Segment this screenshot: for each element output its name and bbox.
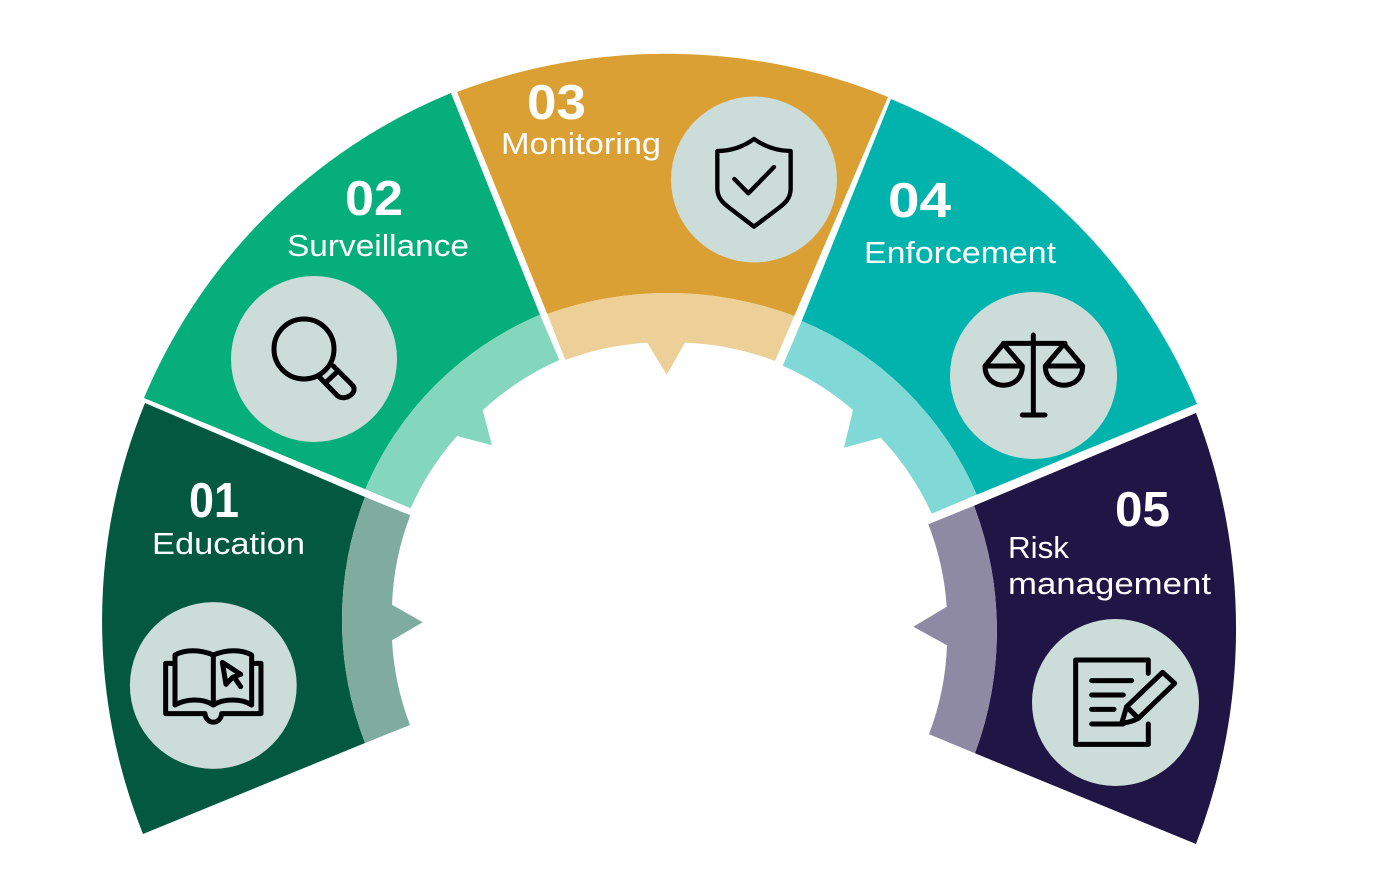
panel: 03 Monitoring <box>457 54 888 375</box>
segment: surveillance outer band <box>144 93 540 489</box>
label: Risk management: management <box>1008 566 1211 601</box>
icon: magnifying glass <box>274 319 354 398</box>
segment: surveillance inner band with pointer <box>365 315 559 508</box>
icon: document with pencil <box>1076 660 1175 744</box>
icon circle: education <box>130 602 297 769</box>
label: Monitoring: Monitoring <box>501 126 661 161</box>
icon circle: risk management <box>1032 619 1199 786</box>
label: Enforcement: Enforcement <box>864 235 1056 270</box>
icon circle: enforcement <box>950 292 1117 459</box>
icon: open book with cursor <box>166 651 261 722</box>
label: Surveillance: Surveillance <box>287 228 469 263</box>
segment: risk management outer band <box>974 413 1236 844</box>
icon circle: monitoring <box>671 96 837 262</box>
panel: 04 Enforcement <box>783 99 1197 514</box>
segment: monitoring outer band <box>457 54 888 316</box>
segment: monitoring inner band with pointer <box>547 293 794 375</box>
label: Risk management: Risk <box>1008 530 1069 565</box>
panel: 02 Surveillance <box>144 93 559 508</box>
number: 02: 02 <box>345 172 403 226</box>
segment: enforcement inner band with pointer <box>783 321 977 514</box>
number: 03: 03 <box>527 76 586 130</box>
segment: education inner band with pointer <box>342 497 423 743</box>
segment: education outer band <box>102 403 365 834</box>
label: Risk management <box>1008 530 1211 601</box>
segment: risk management inner band with pointer <box>913 506 997 753</box>
number: 05: 05 <box>1115 483 1170 537</box>
icon: shield with check mark <box>717 139 791 227</box>
icon: balance scales <box>985 335 1083 415</box>
number: 01: 01 <box>189 474 239 528</box>
segment: enforcement outer band <box>802 99 1197 495</box>
panel: 05 Risk management <box>913 413 1236 844</box>
label: Education: Education <box>152 526 305 561</box>
icon circle: surveillance <box>231 276 397 442</box>
panel: 01 Education <box>102 403 423 834</box>
number: 04: 04 <box>888 174 951 228</box>
